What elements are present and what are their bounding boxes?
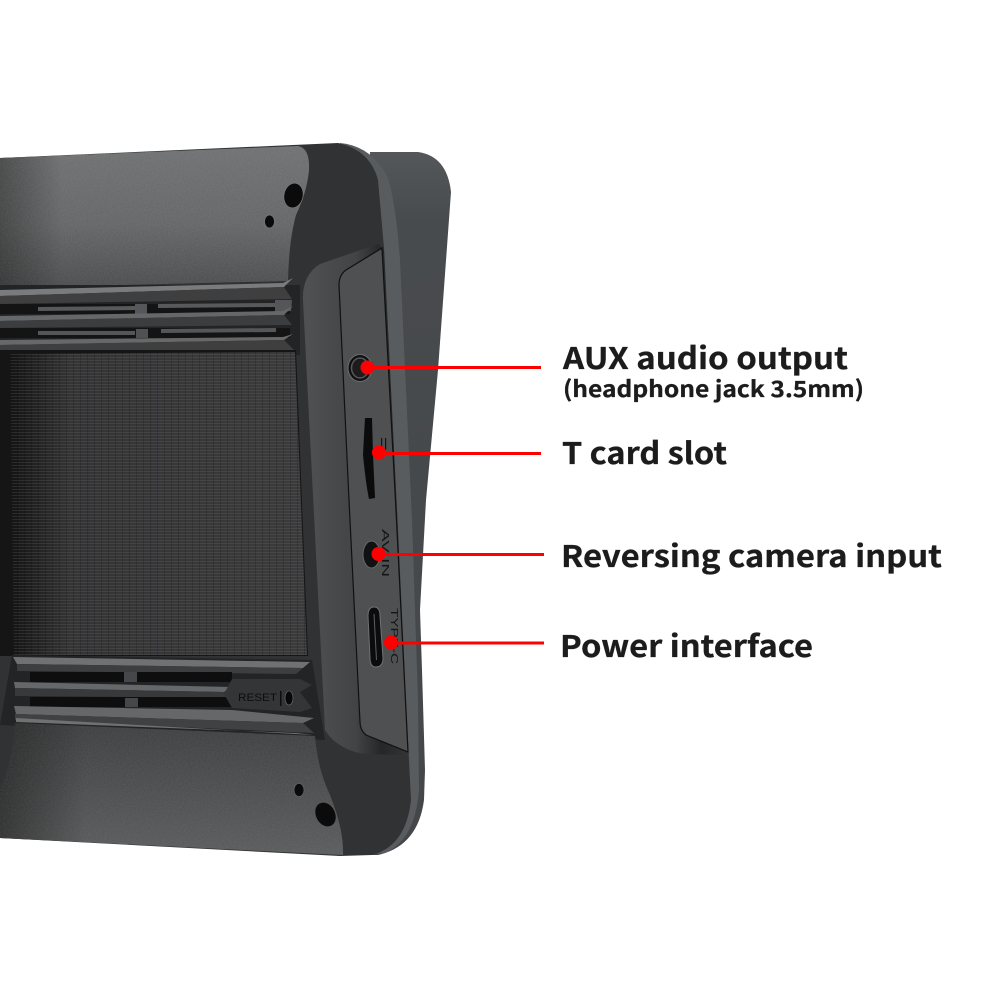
USB type-C port [368, 607, 400, 667]
bottom screw holes [294, 784, 340, 830]
callout: Power interface: Power interface [560, 622, 813, 666]
callout: Reversing camera input: Reversing camera input [561, 532, 942, 576]
audio jack port [348, 354, 372, 382]
AV IN jack port: AV IN [379, 529, 391, 577]
AV IN jack port [363, 529, 391, 577]
callout: Reversing camera input [372, 532, 942, 576]
top rear panel [0, 146, 309, 288]
rear body shell [0, 143, 411, 856]
textured centre panel [0, 350, 308, 656]
USB type-C port: TYPE-C [388, 608, 400, 665]
callout: AUX audio output: AUX audio output [562, 334, 848, 378]
top screw holes [264, 181, 305, 228]
bottom rear panel [0, 723, 343, 855]
device photo [0, 143, 451, 856]
port door plate [339, 248, 408, 752]
callout: T card slot [372, 429, 727, 473]
top vent ribs [0, 278, 300, 355]
reset button area: RESET [238, 692, 277, 704]
T card slot [363, 418, 386, 499]
light bezel band [340, 143, 419, 855]
side port housing [303, 244, 408, 755]
callout: T card slot: T card slot [562, 429, 727, 473]
callout: AUX audio output [360, 334, 864, 404]
reset button area [224, 679, 312, 712]
callout: AUX audio output: (headphone jack 3.5mm) [563, 372, 864, 404]
callout: Power interface [384, 622, 813, 666]
bottom vent ribs [0, 655, 325, 740]
screen side panel [360, 152, 451, 855]
